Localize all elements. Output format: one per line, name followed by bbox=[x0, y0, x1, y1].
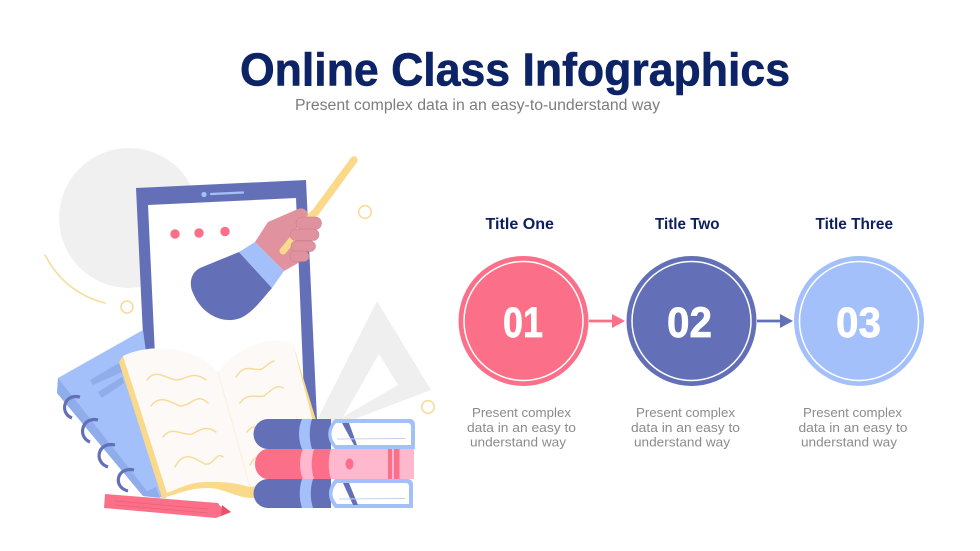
title: Online Class Infographics bbox=[240, 44, 790, 96]
text block bbox=[467, 405, 576, 450]
middle book bbox=[255, 449, 414, 479]
heading: Title Three: Title Three bbox=[816, 216, 893, 233]
circle 03 bbox=[794, 256, 924, 386]
step 2 bbox=[626, 216, 756, 450]
top book bbox=[254, 419, 415, 449]
text block bbox=[798, 405, 908, 450]
circle 02: 02 bbox=[667, 299, 712, 347]
circle 02 bbox=[626, 256, 756, 386]
stack of books bbox=[254, 419, 415, 508]
set square bbox=[318, 301, 431, 430]
text block bbox=[631, 405, 740, 450]
arrow: 02 to 03 bbox=[757, 314, 793, 328]
text block: understand way bbox=[470, 434, 567, 450]
decorative yellow arc bbox=[45, 255, 105, 303]
heading: Title Two: Title Two bbox=[655, 216, 720, 233]
pencil bbox=[104, 494, 231, 518]
decorative rings bbox=[121, 206, 434, 413]
subtitle: Present complex data in an easy-to-understand way bbox=[295, 97, 660, 114]
open book bbox=[119, 341, 320, 498]
illustration: online class bbox=[45, 148, 434, 518]
text block: Present complex bbox=[472, 405, 572, 420]
text block: data in an easy to bbox=[798, 420, 908, 435]
text block: data in an easy to bbox=[467, 420, 576, 435]
text block: understand way bbox=[634, 434, 731, 450]
circle 01: 01 bbox=[503, 299, 543, 347]
tablet bbox=[136, 180, 317, 420]
spiral notebook bbox=[57, 330, 166, 498]
bottom book bbox=[254, 479, 413, 508]
circle 01 bbox=[458, 256, 588, 386]
heading: Title One: Title One bbox=[486, 216, 554, 233]
text block: Present complex bbox=[803, 405, 903, 420]
background grey circle bbox=[59, 148, 199, 288]
hand holding stylus bbox=[191, 160, 354, 320]
step 3 bbox=[794, 216, 924, 450]
circle 03: 03 bbox=[836, 299, 881, 347]
arrow: 01 to 02 bbox=[589, 314, 625, 328]
text block: understand way bbox=[801, 434, 898, 450]
text block: data in an easy to bbox=[631, 420, 740, 435]
text block: Present complex bbox=[636, 405, 736, 420]
step 1 bbox=[458, 216, 588, 450]
